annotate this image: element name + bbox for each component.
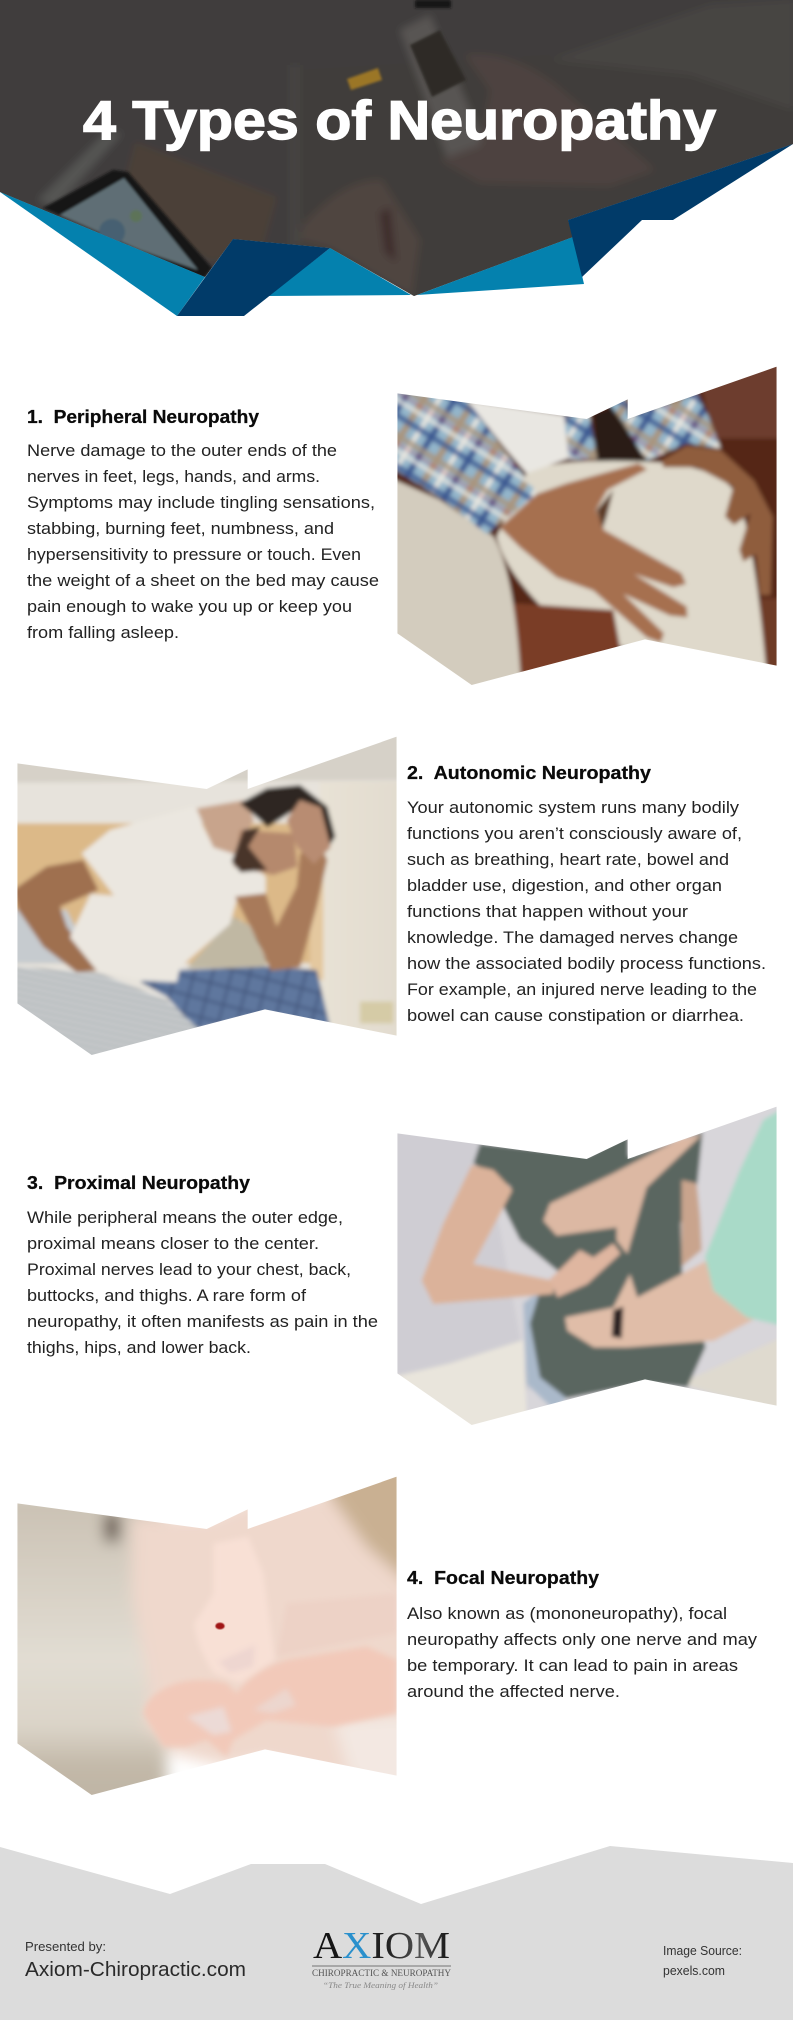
header banner xyxy=(0,0,793,320)
body text 1: Symptoms may include tingling sensations, xyxy=(27,493,375,512)
logo: Axiom Chiropractic & Neuropathy: “The True Meaning of Health” xyxy=(323,1981,439,1990)
photo 2: man in pain sitting on bed xyxy=(17,736,396,1055)
logo: Axiom Chiropractic & Neuropathy: AXIOM xyxy=(313,1925,450,1967)
body text 2: Your autonomic system runs many bodily xyxy=(407,798,740,817)
body text 3: thighs, hips, and lower back. xyxy=(27,1338,251,1357)
section 4: Focal Neuropathy text xyxy=(407,1567,758,1701)
body text 1: the weight of a sheet on the bed may cause xyxy=(27,571,379,590)
body text 3 xyxy=(27,1208,378,1357)
blue accent shapes xyxy=(0,144,793,316)
body text 1: pain enough to wake you up or keep you xyxy=(27,597,352,616)
body text 2: functions you aren’t consciously aware of, xyxy=(407,824,742,843)
section 1: Peripheral Neuropathy text xyxy=(27,406,379,642)
section 2: Autonomic Neuropathy text xyxy=(407,762,766,1025)
body text 1: from falling asleep. xyxy=(27,623,179,642)
body text 3: buttocks, and thighs. A rare form of xyxy=(27,1286,306,1305)
body text 4: Also known as (mononeuropathy), focal xyxy=(407,1604,727,1623)
body text 4: around the affected nerve. xyxy=(407,1682,620,1701)
body text 2 xyxy=(407,798,766,1025)
presented by: Presented by: xyxy=(25,1939,106,1954)
logo: Axiom Chiropractic & Neuropathy xyxy=(312,1925,451,1990)
heading 1: 1. Peripheral Neuropathy xyxy=(27,406,260,427)
body text 1 xyxy=(27,441,379,642)
title: 4 Types of Neuropathy xyxy=(83,89,716,151)
body text 4: neuropathy affects only one nerve and may xyxy=(407,1630,758,1649)
body text 2: functions that happen without your xyxy=(407,902,688,921)
body text 4 xyxy=(407,1604,758,1701)
body text 1: stabbing, burning feet, numbness, and xyxy=(27,519,334,538)
footer band xyxy=(0,1846,793,2020)
body text 1: Nerve damage to the outer ends of the xyxy=(27,441,337,460)
body text 4: be temporary. It can lead to pain in areas xyxy=(407,1656,738,1675)
body text 1: hypersensitivity to pressure or touch. Even xyxy=(27,545,361,564)
body text 2: knowledge. The damaged nerves change xyxy=(407,928,738,947)
body text 3: Proximal nerves lead to your chest, back, xyxy=(27,1260,351,1279)
photo 1: hands on knee xyxy=(397,366,777,685)
body text 2: bladder use, digestion, and other organ xyxy=(407,876,722,895)
heading 3: 3. Proximal Neuropathy xyxy=(27,1172,251,1193)
body text 2: such as breathing, heart rate, bowel and xyxy=(407,850,729,869)
photo 4: pricked fingertip xyxy=(18,1476,397,1795)
body text 1: nerves in feet, legs, hands, and arms. xyxy=(27,467,320,486)
image source xyxy=(663,1943,742,1978)
body text 2: For example, an injured nerve leading to the xyxy=(407,980,757,999)
header photo: glucose meter and tablet, darkened xyxy=(0,0,793,320)
heading 2: 2. Autonomic Neuropathy xyxy=(407,762,652,783)
footer background xyxy=(0,1846,793,2020)
logo: Axiom Chiropractic & Neuropathy: CHIROPRACTIC & NEUROPATHY xyxy=(312,1969,451,1979)
presented by: Axiom-Chiropractic.com xyxy=(25,1959,246,1981)
body text 2: how the associated bodily process functions. xyxy=(407,954,766,973)
presented by xyxy=(25,1939,246,1981)
body text 3: neuropathy, it often manifests as pain in the xyxy=(27,1312,378,1331)
photo 3: back examination xyxy=(398,1106,777,1425)
section 3: Proximal Neuropathy text xyxy=(27,1172,378,1357)
body text 3: While peripheral means the outer edge, xyxy=(27,1208,343,1227)
body text 2: bowel can cause constipation or diarrhea. xyxy=(407,1006,744,1025)
body text 3: proximal means closer to the center. xyxy=(27,1234,319,1253)
image source: pexels.com xyxy=(663,1963,725,1978)
heading 4: 4. Focal Neuropathy xyxy=(407,1567,600,1588)
image source: Image Source: xyxy=(663,1943,742,1958)
